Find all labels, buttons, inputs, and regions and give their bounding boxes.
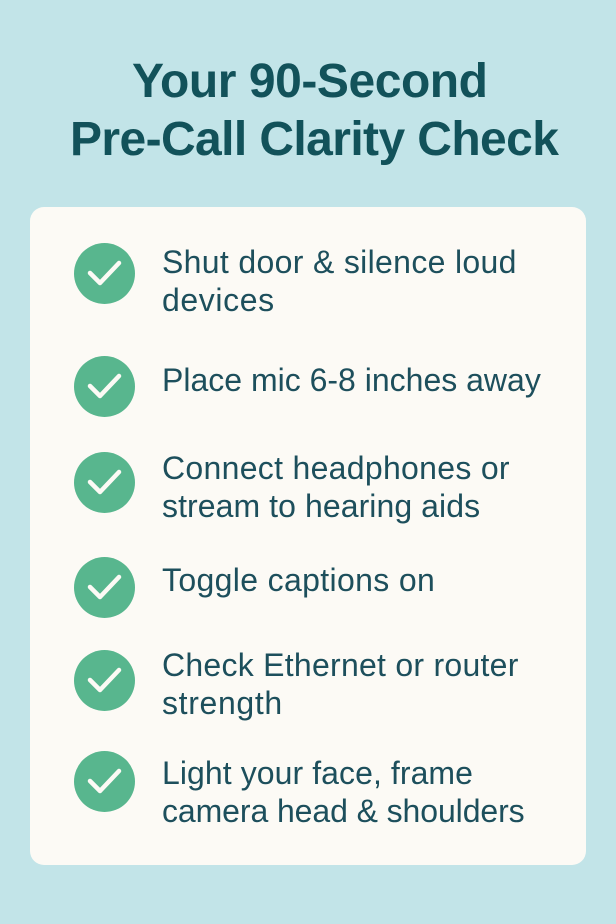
icon: check 3	[74, 452, 135, 513]
text: item 2: Place mic 6-8 inches away	[162, 362, 541, 398]
icon: check 2	[74, 356, 135, 417]
title: Pre-Call Clarity Check	[70, 113, 558, 166]
panel: checklist card	[30, 207, 586, 865]
text: item 1: Shut door & silence loud	[162, 244, 517, 280]
icon: check 5	[74, 650, 135, 711]
text: item 3	[162, 450, 510, 524]
text: item 5	[162, 647, 519, 721]
text: item 3: stream to hearing aids	[162, 488, 480, 524]
text: item 6: Light your face, frame	[162, 755, 473, 791]
text: item 5: strength	[162, 685, 283, 721]
text: item 4: Toggle captions on	[162, 562, 435, 598]
title	[70, 55, 559, 166]
text: item 6	[162, 755, 525, 829]
text: item 5: Check Ethernet or router	[162, 647, 519, 683]
text: item 6: camera head & shoulders	[162, 793, 525, 829]
title: Your 90-Second	[132, 55, 488, 108]
icon: check 1	[74, 243, 135, 304]
text: item 1	[162, 244, 517, 318]
icon: check 6	[74, 751, 135, 812]
text: item 3: Connect headphones or	[162, 450, 510, 486]
icon: check 4	[74, 557, 135, 618]
text: item 1: devices	[162, 282, 275, 318]
